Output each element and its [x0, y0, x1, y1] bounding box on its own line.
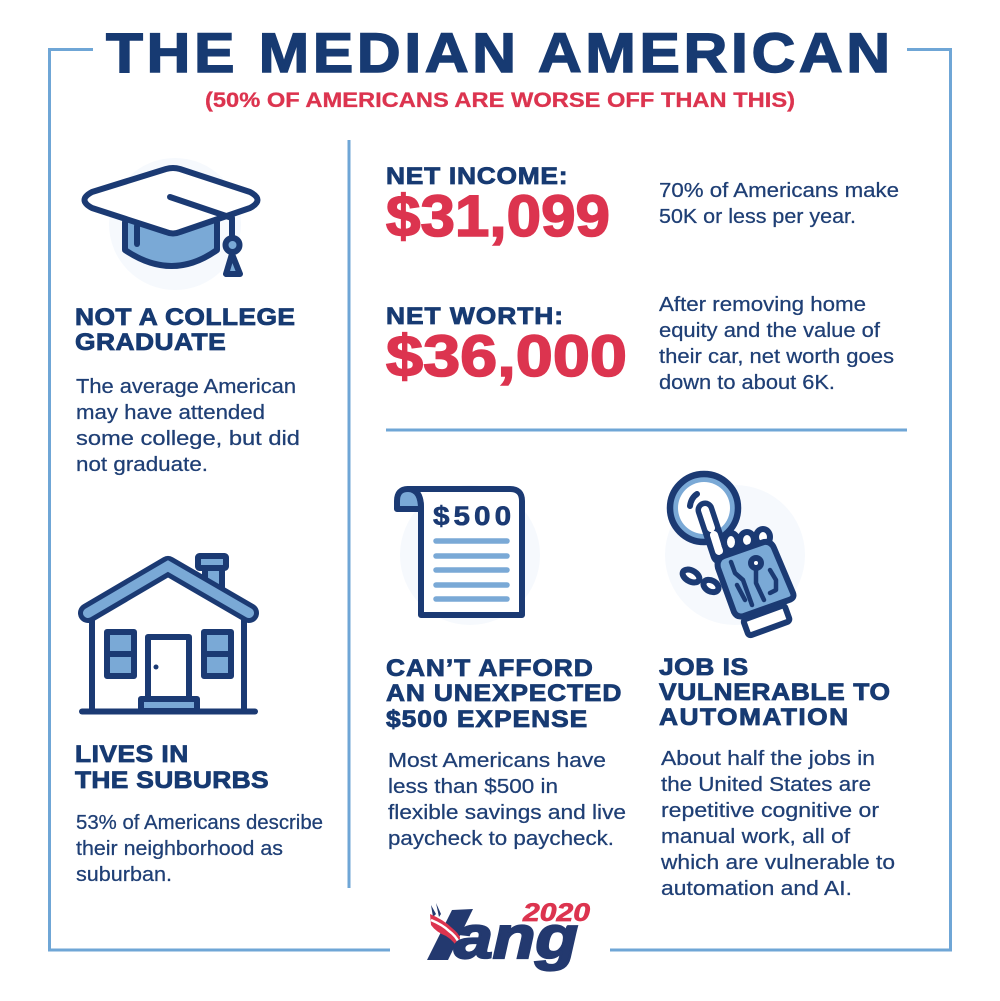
subtitle: (50% OF AMERICANS ARE WORSE OFF THAN THIS) [205, 89, 795, 112]
panel: college [75, 158, 300, 476]
text: worth note: their car, net worth goes [659, 346, 894, 368]
heading: net income: NET INCOME: [386, 163, 568, 190]
panel: expense [386, 485, 626, 850]
text: worth note: down to about 6K. [659, 372, 835, 394]
heading: cannot afford expense: AN UNEXPECTED [386, 680, 621, 707]
text: expense body: paycheck to paycheck. [388, 828, 614, 850]
text: automation body: automation and AI. [661, 878, 852, 900]
icon: bill [397, 485, 540, 625]
text: income note: 50K or less per year. [659, 206, 856, 228]
text: income note: 70% of Americans make [659, 180, 899, 202]
text: college body: may have attended [76, 402, 265, 424]
text: automation body [660, 748, 895, 900]
logo: Yang 2020: ang [454, 904, 578, 971]
text: automation body: repetitive cognitive or [661, 800, 879, 822]
text: college body: not graduate. [76, 454, 208, 476]
icon: bill: $500 [433, 501, 511, 532]
text: suburbs body: suburban. [76, 864, 172, 886]
text: college body: The average American [76, 376, 296, 398]
icon: robot hand [665, 474, 805, 636]
icon: house [82, 556, 255, 712]
heading: not a college graduate [75, 304, 295, 356]
title: THE MEDIAN AMERICAN [106, 22, 890, 84]
heading: job vulnerable: JOB IS [659, 654, 748, 681]
panel: net worth [386, 294, 894, 394]
panel: net income [386, 163, 899, 249]
heading: cannot afford expense: CAN’T AFFORD [386, 655, 593, 682]
heading: lives in the suburbs: THE SUBURBS [75, 767, 269, 794]
text: expense body: less than $500 in [388, 776, 558, 798]
heading: job vulnerable: VULNERABLE TO [659, 679, 890, 706]
logo: Yang 2020: 2020 [522, 899, 590, 927]
text: automation body: About half the jobs in [661, 748, 875, 770]
logo: Yang 2020 [427, 899, 590, 971]
number: net income: $31,099 [386, 184, 610, 249]
heading: job vulnerable [659, 654, 890, 731]
text: automation body: which are vulnerable to [660, 852, 895, 874]
panel: suburbs [75, 556, 323, 886]
text: automation body: manual work, all of [661, 826, 850, 848]
heading: lives in the suburbs [75, 741, 269, 794]
number: net worth: $36,000 [386, 324, 627, 389]
text: expense body: Most Americans have [388, 750, 606, 772]
heading: not a college graduate: NOT A COLLEGE [75, 304, 295, 331]
text: suburbs body: their neighborhood as [76, 838, 283, 860]
text: worth note: equity and the value of [659, 320, 880, 342]
text: worth note [659, 294, 894, 394]
text: suburbs body [76, 812, 323, 886]
text: expense body: flexible savings and live [388, 802, 626, 824]
text: college body: some college, but did [76, 428, 300, 450]
heading: lives in the suburbs: LIVES IN [75, 741, 188, 768]
heading: job vulnerable: AUTOMATION [659, 704, 848, 731]
panel: automation [659, 474, 895, 900]
text: worth note: After removing home [659, 294, 866, 316]
icon: graduation cap [84, 158, 258, 290]
text: income note [659, 180, 899, 228]
text: expense body [388, 750, 626, 850]
text: college body [76, 376, 300, 476]
heading: cannot afford expense: $500 EXPENSE [386, 706, 587, 733]
heading: cannot afford expense [386, 655, 621, 733]
heading: not a college graduate: GRADUATE [75, 329, 226, 356]
heading: net worth: NET WORTH: [386, 303, 563, 330]
text: suburbs body: 53% of Americans describe [76, 812, 323, 834]
text: automation body: the United States are [661, 774, 871, 796]
